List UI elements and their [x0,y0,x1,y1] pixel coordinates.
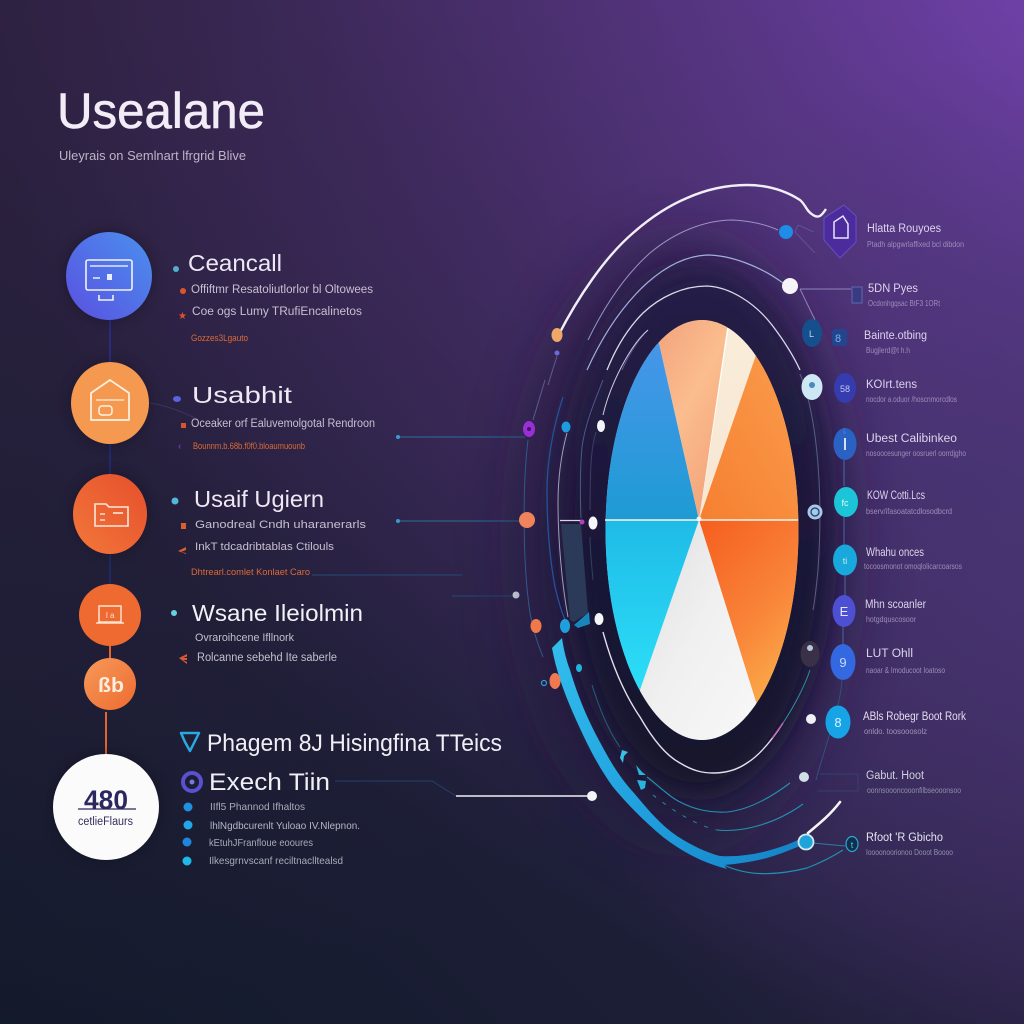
decorative rings [524,185,845,874]
item 11: oonnsoooncooonfilbseooonsoo [867,785,961,795]
subtitle: Uleyrais on Semlnart lfrgrid Blive [59,148,246,163]
item 10: onldo. toosooosolz [864,726,927,736]
text block: Usaif Ugiern: Usaif Ugiern [194,486,324,512]
item 9: naoar & Imoducoot Ioatoso [866,665,945,675]
item 12: Rfoot 'R Gbicho [866,832,943,844]
white connector [560,520,582,522]
slice: cream [700,328,756,516]
slice: cyan [606,520,698,690]
item 3: 8 [835,333,841,345]
text block: Usabhit: Oceaker orf Ealuvemolgotal Rendroon [191,418,375,430]
item 6: KOW Cotti.Lcs [867,490,925,502]
bullet list: lhlNgdbcurenlt Yuloao IV.Nlepnon. [210,820,360,832]
item 3: Bugjlerd@t h.h [866,345,910,355]
blue accent wedge [574,612,590,628]
sweep tail line [722,850,843,874]
icon: red-orange folder circle [73,474,147,554]
text block: Wsane Ileiolmin: Rolcanne sebehd Ite saberle [197,652,337,664]
item 9: 9 [839,655,847,670]
white sweep tail [808,802,840,833]
icon: laptop circle [79,584,141,646]
icon: small orange circle [84,658,136,710]
item 7: tocoosmonot omoqlolicarcoarsos [864,561,962,571]
item 3 [802,319,927,355]
text block: Wsane Ileiolmin [171,600,363,664]
item 12 [798,832,953,857]
item 6: bserv/ifasoatatcdlosodbcrd [866,506,952,516]
item 10: 8 [834,715,842,730]
item 11: Gabut. Hoot [866,770,925,782]
text block: Usabhit: Usabhit [192,382,293,408]
item 4 [802,373,957,404]
item 3: Bainte.otbing [864,330,927,342]
dark panel bar [561,524,588,622]
text block: Ceancall: ★ [178,311,187,322]
slice: orange [700,356,798,520]
item 5 [834,427,966,460]
chart nodes [519,328,646,790]
heading: Phagem Hisingfina Tteics: Phagem 8J Hisingfina TTeics [207,730,502,757]
item 7: ti [843,556,847,566]
item 9: LUT Ohll [866,648,913,660]
item 4: nocdor a.oduor /hoscnmorcdlos [866,394,957,404]
item 3: L [809,329,814,339]
heading: Exech Tiin: Exech Tiin [209,769,330,796]
leader line: Wsane Ileiolmin [196,678,545,680]
item 1: Hlatta Rouyoes [867,223,941,235]
item 12: t [851,840,854,850]
slice: peach [659,315,729,520]
title: Usealane [57,83,265,139]
blue sweep arc [552,638,800,869]
item 9 [800,627,945,680]
text block: Wsane Ileiolmin: Wsane Ileiolmin [192,600,363,626]
text block: Usabhit [173,382,375,452]
item 8 [832,575,926,627]
text block: Usabhit: Bounnm.b.68b.f0f0.bloaumuounb [193,441,305,452]
icon: blue monitor circle [66,232,152,320]
bullet list: kEtuhJFranfloue eooures [209,837,313,849]
pie chart [605,320,798,740]
chart halo [520,240,850,840]
text block: Ceancall: Offiftmr Resatoliutlorlor bl Oltowees [191,284,373,296]
item 1 [779,205,964,258]
leader lines: Usaif Ugiern [312,519,520,575]
text block: Ceancall [173,250,373,344]
timeline connectors [106,320,195,756]
item 8: Mhn scoanler [865,599,926,611]
faint leader at wsane row [452,592,520,598]
panel: radial chart [519,185,850,874]
teal arc [592,685,620,747]
icon: laptop circle: l a [106,611,115,620]
panel: left timeline [53,232,195,860]
item 2: Ocdonhgqsac BtF3 1ORt [868,298,940,308]
item 11 [799,770,961,795]
item 12: Ioooonoorionoo Dooot Boooo [866,847,953,857]
slice: blue [606,342,698,520]
bullet list: Ilkesgrnvscanf reciltnaclltealsd [209,855,343,867]
item 7: Whahu onces [866,547,924,559]
item 6: fc [841,498,849,508]
leader line: Usabhit [396,435,525,439]
text block: Usaif Ugiern: InkT tdcadribtablas Ctilouls [195,541,335,553]
item 5: nosoocesunger oosruerl oorrdjgho [866,448,966,458]
item 4: 58 [840,384,850,394]
icon: orange package circle [71,362,149,444]
text block: Ceancall: Coe ogs Lumy TRufiEncalinetos [192,306,362,318]
text block: Usaif Ugiern: Ganodreal Cndh uharanerarls [195,519,367,531]
white stat circle: 480 [84,785,128,815]
item 2: 5DN Pyes [868,283,918,295]
item 1: Ptadh alpgwrlaffixed bcl dibdon [867,239,964,249]
item 10 [806,680,966,780]
bullet list [182,801,360,867]
item 4: KOIrt.tens [866,379,917,391]
white stat circle: cetlieFlaurs [78,816,133,828]
text block: Usaif Ugiern: Dhtrearl.comlet Konlaet Caro [191,567,310,578]
text block: Usabhit: ‹ [178,441,181,452]
text block: Ceancall: Gozzes3Lgauto [191,333,248,344]
item 8: hotgdquscosoor [866,614,916,624]
item 8: E [840,604,849,619]
white ring bottom [603,632,783,773]
text block: Usaif Ugiern [172,486,367,578]
leader line: Ceancall [248,340,552,342]
leader line: Exech Tiin [335,781,597,801]
item 5: Ubest Calibinkeo [866,433,957,445]
panel: right labels [779,205,966,857]
text block: Wsane Ileiolmin: Ovraroihcene Ifllnork [195,632,294,644]
white stat circle [53,754,159,860]
item 7 [833,517,962,576]
text block: Ceancall: Ceancall [188,250,282,276]
item 2 [782,278,940,320]
item 10: ABls Robegr Boot Rork [863,711,966,723]
bullet list: IIfl5 Phannod Ifhaltos [210,801,305,813]
icon: small orange circle: ßb [98,675,124,697]
outer white arc [558,185,826,336]
slice: white [640,522,756,740]
item 6 [808,460,952,520]
slice: red orange [700,520,798,702]
